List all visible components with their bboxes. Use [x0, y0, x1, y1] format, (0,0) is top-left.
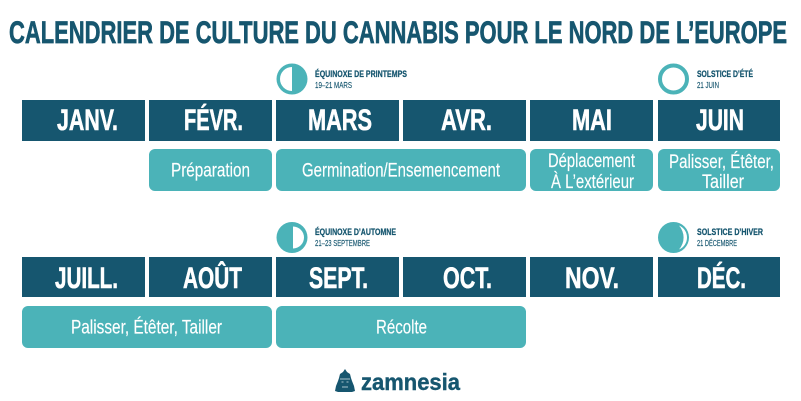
month: April	[403, 100, 526, 141]
activity: moving outdoors	[530, 149, 653, 193]
activity: germination	[276, 149, 526, 191]
month: June: JUIN	[696, 104, 744, 137]
activity: preparation: Préparation	[171, 160, 250, 182]
icon: spring equinox half moon	[276, 64, 308, 94]
label: autumn equinox	[315, 227, 396, 248]
label: spring equinox	[315, 69, 407, 90]
label: summer solstice: 21 JUIN	[697, 80, 719, 90]
month: October: OCT.	[443, 262, 492, 295]
month: September	[276, 257, 399, 297]
month: March	[276, 100, 399, 141]
activity: moving outdoors: À L’extérieur	[551, 172, 635, 193]
month: May: MAI	[572, 104, 612, 137]
activity: germination: Germination/Ensemencement	[302, 160, 501, 182]
activity: preparation	[149, 149, 272, 191]
month: April: AVR.	[441, 104, 492, 137]
icon: summer solstice ring	[660, 66, 687, 92]
month: February	[149, 100, 272, 141]
label: summer solstice: SOLSTICE D’ÉTÉ	[697, 69, 753, 80]
activity: train and top: Tailler	[702, 172, 745, 193]
activity: harvest: Récolte	[376, 318, 427, 338]
label: spring equinox: 19–21 MARS	[315, 80, 352, 90]
label: autumn equinox: 21–23 SEPTEMBRE	[315, 238, 370, 248]
label: winter solstice: 21 DÉCEMBRE	[697, 238, 737, 248]
month row 1	[22, 100, 780, 141]
month: August	[149, 257, 272, 297]
activity: harvest	[276, 306, 526, 348]
label: summer solstice	[697, 69, 753, 90]
month: November	[530, 257, 653, 297]
month: June	[658, 100, 780, 141]
icon: autumn equinox half moon	[276, 222, 308, 253]
icon: zamnesia head	[335, 369, 355, 392]
activity: train and top: Palisser, Étêter,	[669, 152, 774, 173]
month: January: JANV.	[57, 104, 118, 137]
month: December: DÉC.	[697, 261, 746, 295]
month: August: AOÛT	[183, 261, 242, 295]
month: March: MARS	[308, 104, 372, 137]
month: November: NOV.	[565, 262, 619, 295]
label: winter solstice: SOLSTICE D’HIVER	[697, 227, 763, 238]
activity: moving outdoors: Déplacement	[548, 151, 636, 172]
wordmark: zamnesia	[361, 369, 460, 395]
icon: winter solstice crescent	[658, 222, 689, 253]
logo: zamnesia	[335, 369, 460, 395]
month: December	[658, 257, 780, 297]
activity row 1	[149, 149, 780, 193]
activity: train and top: Palisser, Étêter, Tailler	[71, 318, 223, 338]
month: September: SEPT.	[309, 262, 368, 295]
month: February: FÉVR.	[184, 103, 243, 137]
activity row 2	[22, 306, 526, 348]
month: July: JUILL.	[55, 262, 118, 295]
month row 2	[22, 257, 780, 297]
month: October	[403, 257, 526, 297]
activity: train and top	[22, 306, 272, 348]
month: July	[22, 257, 145, 297]
label: autumn equinox: ÉQUINOXE D’AUTOMNE	[315, 227, 396, 238]
month: January	[22, 100, 145, 141]
label: spring equinox: ÉQUINOXE DE PRINTEMPS	[315, 69, 407, 80]
label: winter solstice	[697, 227, 763, 248]
month: May	[530, 100, 653, 141]
activity: train and top	[658, 149, 780, 193]
